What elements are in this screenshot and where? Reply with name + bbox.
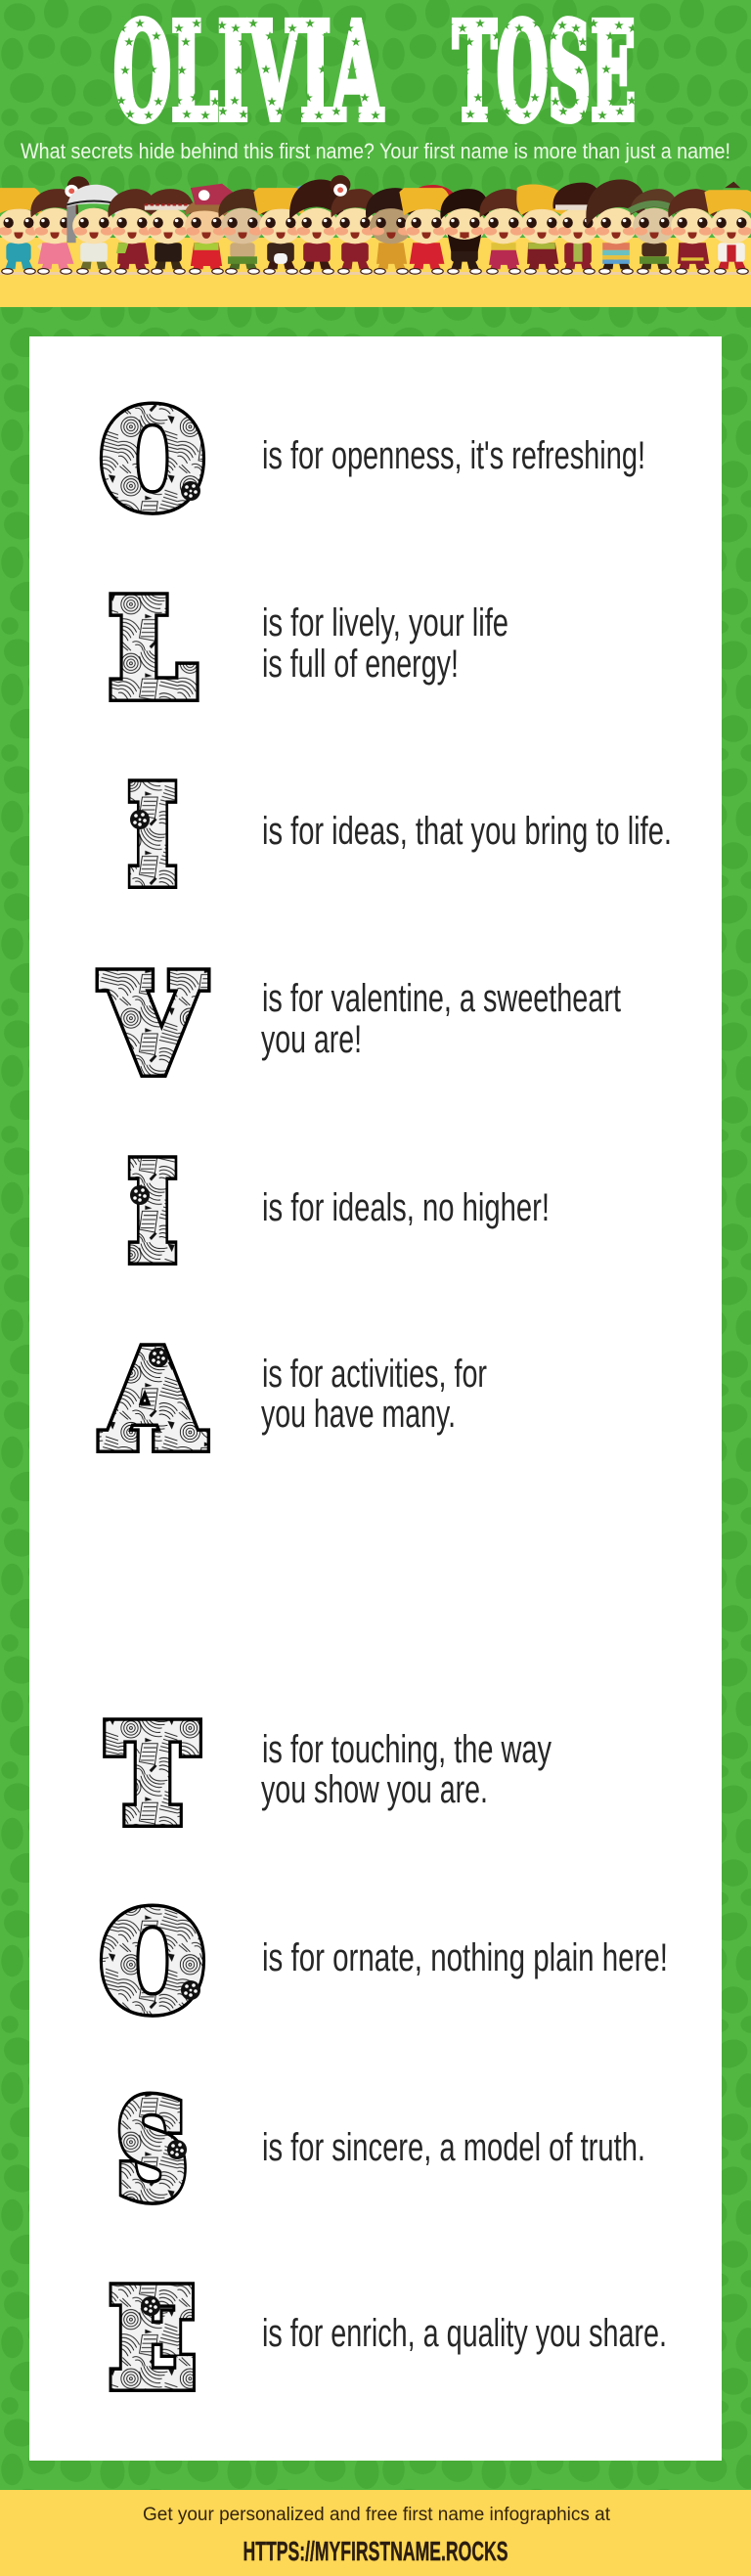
letter O: O (103, 385, 202, 535)
text (261, 1353, 487, 1436)
letter I: I (130, 761, 175, 910)
character 11 (366, 188, 416, 274)
row: S sincere (118, 2075, 645, 2225)
yellow band with floor (0, 238, 751, 307)
footer text: Get your personalized and free first name infographics at (143, 2505, 611, 2525)
character 9 (289, 179, 344, 274)
letter O: O (103, 1888, 202, 2037)
character 7 (218, 189, 267, 274)
text (262, 601, 508, 686)
row: O openness (103, 385, 645, 535)
text: is for touching, the way (262, 1728, 552, 1771)
letter I: I (130, 761, 175, 910)
row: V valentine (104, 950, 621, 1099)
character 8 (253, 185, 321, 274)
letter E: E (111, 2264, 194, 2414)
letter L: L (111, 574, 194, 724)
letter V: V (104, 950, 202, 1099)
letter A: A (104, 1325, 202, 1475)
row: L lively (111, 574, 508, 724)
character 2 (30, 176, 90, 274)
character 3 (66, 185, 123, 274)
character 5 (145, 189, 196, 274)
character 15 (516, 185, 567, 274)
character 19 (668, 189, 717, 274)
text: is for lively, your life (262, 601, 508, 644)
header (21, 0, 730, 163)
letter I: I (130, 1137, 175, 1287)
character 6 (185, 184, 236, 274)
text: you have many. (261, 1393, 456, 1436)
character 14 (479, 189, 528, 274)
row of cartoon characters (0, 175, 751, 274)
text (261, 977, 621, 1061)
character 12 (399, 185, 456, 274)
character 10 (331, 175, 378, 274)
character 1 (0, 188, 46, 274)
letter E: E (111, 2264, 194, 2414)
letter S: S (118, 2075, 186, 2225)
letter O: O (103, 385, 202, 535)
character 17 (586, 179, 645, 274)
row: A activities (104, 1325, 487, 1475)
letter T: T (110, 1700, 196, 1849)
character 4 (108, 189, 156, 274)
row: T touching (110, 1700, 552, 1849)
row: E enrich (111, 2264, 667, 2414)
text (261, 1728, 552, 1811)
row: I ideas (130, 761, 672, 910)
text: is for ideals, no higher! (262, 1186, 550, 1229)
letter O: O (103, 1888, 202, 2037)
text: you are! (261, 1018, 362, 1061)
text: is for valentine, a sweetheart (262, 977, 621, 1020)
text: you show you are. (261, 1768, 488, 1811)
row: I ideals (130, 1137, 550, 1287)
text: is for activities, for (262, 1353, 487, 1396)
letter L: L (111, 574, 194, 724)
letter T: T (110, 1700, 196, 1849)
character 13 (440, 189, 489, 274)
footer url: HTTPS://MYFIRSTNAME.ROCKS (243, 2536, 508, 2566)
letter V: V (104, 950, 202, 1099)
letter I: I (130, 1137, 175, 1287)
character 20 (704, 182, 751, 274)
character 18 (630, 189, 679, 274)
text: is full of energy! (262, 643, 459, 686)
letter S: S (118, 2075, 186, 2225)
panel: white letter list (29, 336, 722, 2461)
letter A: A (104, 1325, 202, 1475)
footer (0, 2490, 751, 2576)
character 16 (552, 183, 605, 274)
row: O ornate (103, 1888, 668, 2037)
